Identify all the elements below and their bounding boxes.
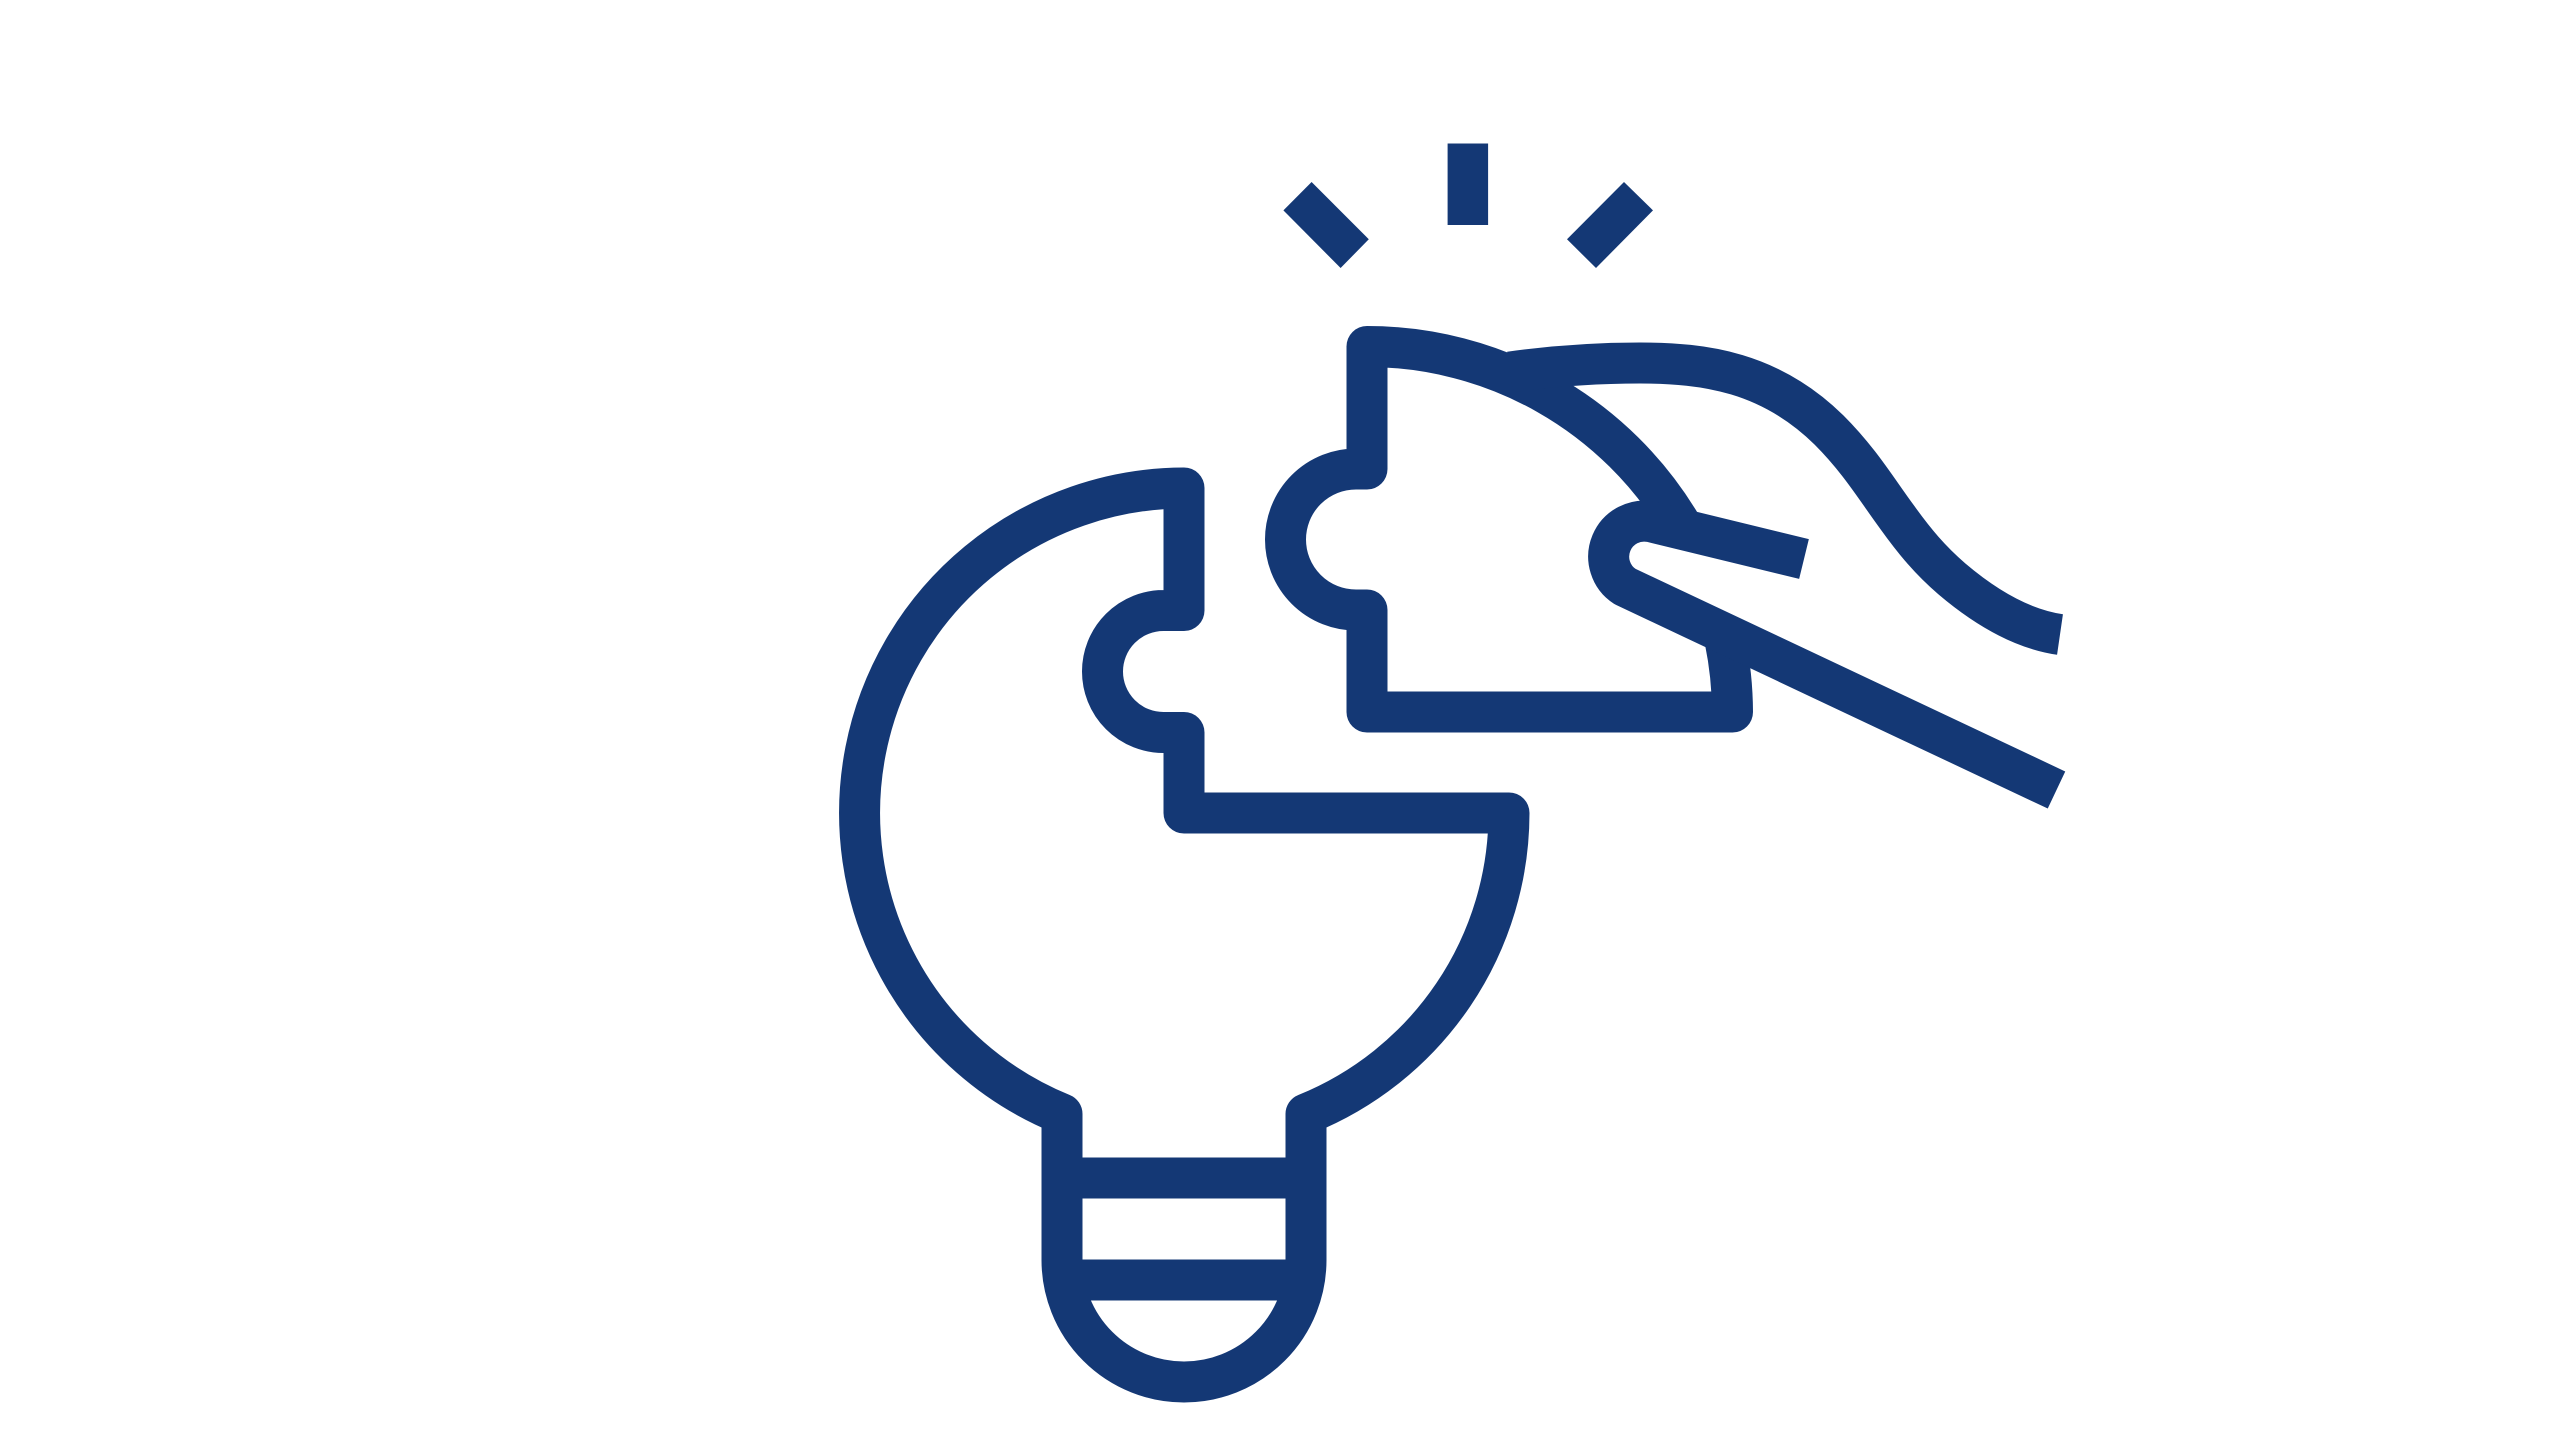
finger and wrist line xyxy=(1609,521,2056,790)
icon: puzzle piece xyxy=(1285,346,1732,712)
centre ray xyxy=(1448,144,1488,225)
bulb outline xyxy=(860,488,1509,1382)
hand upper contour xyxy=(1510,363,2060,634)
icon: light bulb with missing puzzle corner xyxy=(860,488,1509,1382)
icon: spark rays xyxy=(1283,144,1653,268)
bulb base upper band xyxy=(1062,1158,1306,1198)
icon: hand holding puzzle piece xyxy=(1510,363,2060,790)
bulb base lower band xyxy=(1062,1260,1306,1300)
left ray xyxy=(1283,182,1369,268)
right ray xyxy=(1567,182,1653,268)
